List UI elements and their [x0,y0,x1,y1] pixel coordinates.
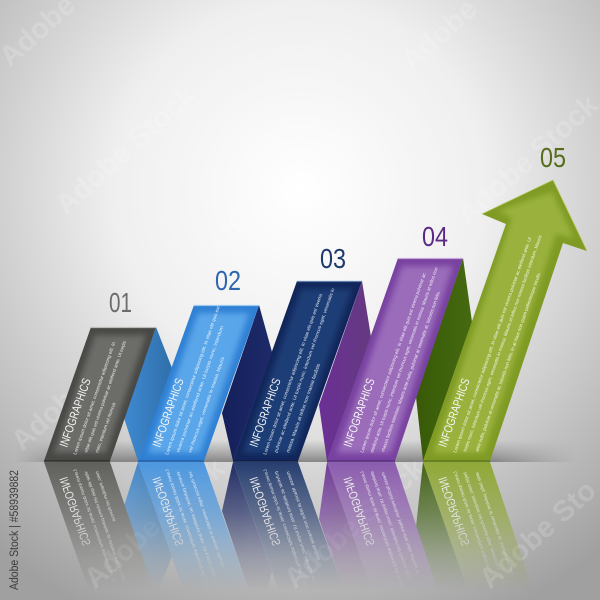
floor shadow band [24,442,564,462]
reflection of the ribbon: turpis nunc, interdum vel rhoncus eget, venenatis in massa. [462,472,507,587]
number 04: 04 [422,221,448,252]
panel 02 blue: Lorem ipsum dolor sit amet, consectetur adipiscing elit. In vitae elit quis est [164,305,221,455]
reflection of the ribbon: Lorem ipsum dolor sit amet, consectetur adipiscing elit. In vitae [452,471,500,594]
reflection of the ribbon: INFOGRAPHICS [341,475,378,548]
panel 04 purple: INFOGRAPHICS [341,376,378,449]
panel 04 purple: Lorem ipsum dolor sit amet, consectetur adipiscing elit. In vitae elit quis est viverra pulvinar ac [359,272,427,453]
reflection of the ribbon: ante nulla, pulvinar at venenatis at, lobortis non felis. [474,472,515,576]
panel 01 gray: INFOGRAPHICS [57,376,94,449]
panel 03 navy: INFOGRAPHICS [247,376,284,449]
panel 02 blue: INFOGRAPHICS [150,376,187,449]
reflection of the ribbon: vel rhoncus eget, venenatis in massa. Mauris [187,471,226,568]
reflection of the ribbon: pulvinar ac eleifend ante. Ut turpis nunc, interdum vel [273,471,317,583]
reflection of the ribbon: INFOGRAPHICS [436,475,473,548]
number 02: 02 [215,265,241,296]
panel 04 purple: massa facilisis interdum. Mauris ante nulla, pulvinar at venenatis at, lobortis non felis. [380,290,441,452]
panel 04 purple: eleifend ante. Ut turpis nunc, interdum vel rhoncus eget, venenatis in massa. Mauris at tellus non [369,266,439,453]
reflection of the ribbon: Lorem ipsum dolor sit amet, consectetur adipiscing elit. In [72,469,116,583]
watermarks: Adobe Stock [201,120,355,263]
reflection of the ribbon: INFOGRAPHICS [57,475,94,548]
reflection of the ribbon: nunc, interdum vel rhoncus [94,471,117,523]
panel 01 gray: nunc, interdum vel rhoncus [94,401,117,453]
watermarks: Adobe Stock [278,452,432,595]
reflection of the ribbon: INFOGRAPHICS [150,475,187,548]
panel 01 gray: Lorem ipsum dolor sit amet, consectetur adipiscing elit. In [72,341,116,455]
reflection of the ribbon: massa. Mauris at tellus non massa facilisis [285,471,321,562]
reflection of the ribbon: Lorem ipsum dolor sit amet, consectetur adipiscing elit. In vitae [262,469,309,591]
reflection of the ribbon: massa facilisis interdum. Mauris ante nulla, pulvinar at [380,472,421,575]
fold: navy to purple [319,281,371,461]
number 05: 05 [540,142,566,173]
panel 03 navy [233,281,362,461]
fold: purple to green [416,258,472,461]
panel 05 green arrow: turpis nunc, interdum vel rhoncus eget, venenatis in massa. Mauris at tellus non massa facilisis interdum. Mauris [462,234,543,452]
panel 01 gray [44,327,156,461]
panel 02 blue: vel rhoncus eget, venenatis in massa. Mauris [187,356,226,453]
reflection of the ribbon: vitae elit quis est viverra pulvinar ac eleifend ante. Ut turpis [83,471,127,584]
panel 01 gray: vitae elit quis est viverra pulvinar ac eleifend ante. Ut turpis [83,340,127,453]
panel 03 navy: massa. Mauris at tellus non massa facilisis [285,362,321,453]
reflection of the ribbon: Lorem ipsum dolor sit amet, consectetur adipiscing elit. In vitae [359,471,405,591]
reflection of the ribbon: INFOGRAPHICS [247,475,284,548]
number 03: 03 [320,243,346,274]
reflection of the ribbon: Lorem ipsum dolor sit amet, consectetur adipiscing elit. In vitae [164,469,212,593]
panel 05 green arrow: ante nulla, pulvinar at venenatis at, lobortis non felis. In at risus non quam pellentesque iaculis. [474,271,542,452]
reflection of the ribbon: viverra pulvinar ac eleifend ante. Ut turpis nunc, [175,471,218,580]
fold: gray to blue [124,327,172,461]
panel 03 navy: Lorem ipsum dolor sit amet, consectetur adipiscing elit. In vitae elit quis est viverra [262,293,323,455]
panel 02 blue: viverra pulvinar ac eleifend ante. Ut turpis nunc, interdum [175,325,224,453]
reflection of the ribbon: eleifend ante. Ut turpis nunc, interdum vel rhoncus eget, [369,471,412,580]
panel 04 purple [327,258,463,461]
watermarks: Adobe Stock [49,78,203,221]
stock id caption: Adobe Stock | #58939882 [9,470,21,590]
panel 02 blue [138,305,259,461]
fold: blue to navy [222,305,272,461]
watermarks: Adobe [5,373,94,457]
panel 05 green arrow: Lorem ipsum dolor sit amet, consectetur adipiscing elit. In vitae elit quis est viverra pulvinar ac eleifend ante. Ut [452,236,533,453]
number 01: 01 [109,287,132,318]
watermarks: Adobe Stock [78,452,232,595]
panel 05 green arrow [423,180,587,461]
watermarks: Adobe Stock [451,88,600,231]
panel 05 green arrow: INFOGRAPHICS [436,376,473,449]
panel 03 navy: pulvinar ac eleifend ante. Ut turpis nunc, interdum vel rhoncus eget, venenatis in [273,287,336,453]
watermarks: Adobe Sto [473,474,600,595]
reflection of the ribbon [44,462,529,584]
